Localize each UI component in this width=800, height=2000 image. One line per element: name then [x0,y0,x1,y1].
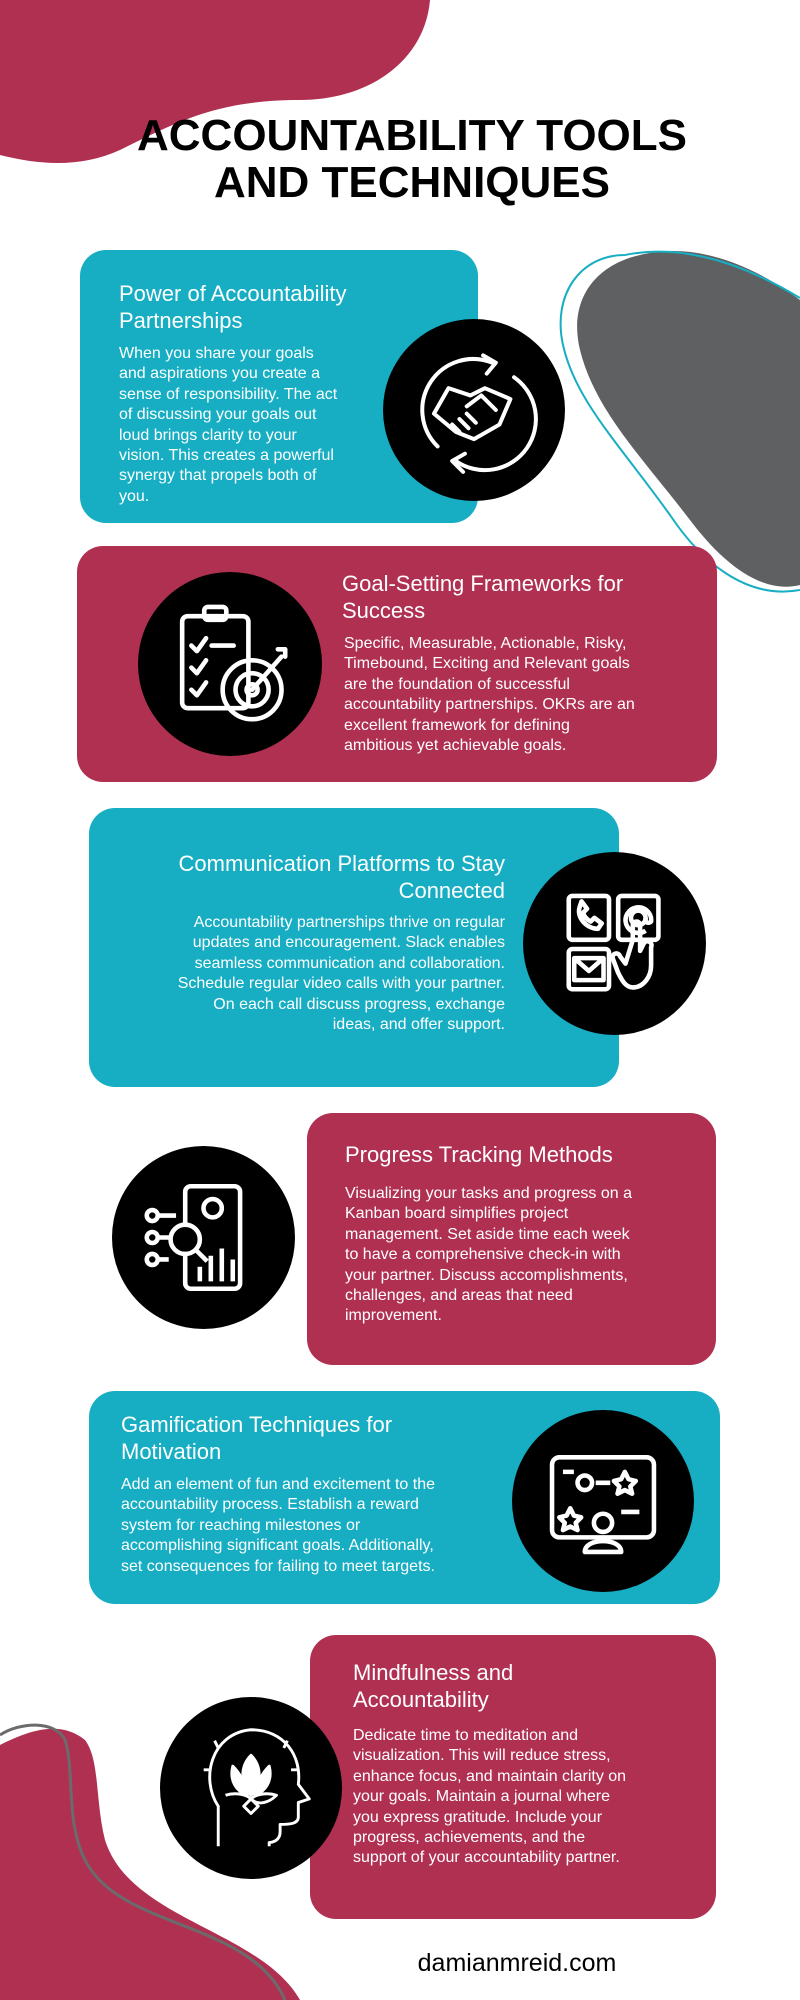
heading [342,571,623,623]
panel: communication platforms [89,808,619,1087]
body text: Schedule regular video calls with your partner. [178,975,505,992]
panel: accountability partnerships [80,250,478,523]
body text: system for reaching milestones or [121,1517,360,1534]
body text: Accountability partnerships thrive on regular [194,914,505,931]
heading [121,1412,392,1464]
body text: seamless communication and collaboration. [195,955,505,972]
body text: management. Set aside time each week [345,1226,630,1243]
body text: of discussing your goals out [119,406,316,423]
panel: progress tracking [307,1113,716,1365]
heading: Gamification Techniques for [121,1412,392,1437]
heading: Accountability [353,1687,489,1712]
body text [344,635,635,754]
body text: enhance focus, and maintain clarity on [353,1768,626,1785]
heading: Mindfulness and [353,1660,513,1685]
heading [353,1660,513,1712]
panel: mindfulness [310,1635,716,1919]
heading: Communication Platforms to Stay [179,851,505,876]
body text [353,1727,626,1866]
body text: On each call discuss progress, exchange [213,996,505,1013]
icon: mind lotus [160,1697,342,1879]
body text [121,1476,435,1575]
icon: handshake [383,319,565,501]
title: AND TECHNIQUES [214,158,610,207]
body text: When you share your goals [119,345,314,362]
heading: Goal-Setting Frameworks for [342,571,623,596]
body text: accomplishing significant goals. Additionally, [121,1537,434,1554]
body text: Add an element of fun and excitement to the [121,1476,435,1493]
body text [119,345,338,505]
heading: Progress Tracking Methods [345,1142,613,1167]
body text: and aspirations you create a [119,365,320,382]
body text: progress, achievements, and the [353,1829,585,1846]
body text: Kanban board simplifies project [345,1205,568,1222]
body text: set consequences for failing to meet targets. [121,1558,435,1575]
body text: ideas, and offer support. [333,1016,505,1033]
body text: challenges, and areas that need [345,1287,573,1304]
panel: goal-setting frameworks [77,546,717,782]
panel: gamification [89,1391,720,1604]
body text: loud brings clarity to your [119,427,297,444]
body text: Visualizing your tasks and progress on a [345,1185,632,1202]
body text: excellent framework for defining [344,717,570,734]
body text: to have a comprehensive check-in with [345,1246,621,1263]
body text: improvement. [345,1307,442,1324]
body text: support of your accountability partner. [353,1849,620,1866]
footer: website: damianmreid.com [418,1949,616,1977]
body text: updates and encouragement. Slack enables [193,934,505,951]
icon: communication [523,852,706,1035]
body text: sense of responsibility. The act [119,386,337,403]
title [137,111,687,207]
heading [119,281,346,333]
body text: visualization. This will reduce stress, [353,1747,611,1764]
body text: your partner. Discuss accomplishments, [345,1267,628,1284]
title: ACCOUNTABILITY TOOLS [137,111,687,160]
heading: Success [342,598,425,623]
body text: your goals. Maintain a journal where [353,1788,610,1805]
icon: clipboard target [138,572,322,756]
body text: are the foundation of successful [344,676,570,693]
body text [345,1185,632,1324]
body text: accountability partnerships. OKRs are an [344,696,635,713]
body text: Specific, Measurable, Actionable, Risky, [344,635,626,652]
heading: Motivation [121,1439,221,1464]
icon: game board [512,1410,694,1592]
heading: Power of Accountability [119,281,346,306]
body text: ambitious yet achievable goals. [344,737,566,754]
body text: Timebound, Exciting and Relevant goals [344,655,630,672]
body text: you express gratitude. Include your [353,1809,602,1826]
heading: Partnerships [119,308,243,333]
heading: Connected [399,878,505,903]
icon: phone analytics [112,1146,295,1329]
body text: you. [119,488,149,505]
heading [179,851,505,903]
body text: Dedicate time to meditation and [353,1727,578,1744]
body text: synergy that propels both of [119,467,316,484]
body text [178,914,505,1033]
body text: vision. This creates a powerful [119,447,334,464]
body text: accountability process. Establish a reward [121,1496,419,1513]
